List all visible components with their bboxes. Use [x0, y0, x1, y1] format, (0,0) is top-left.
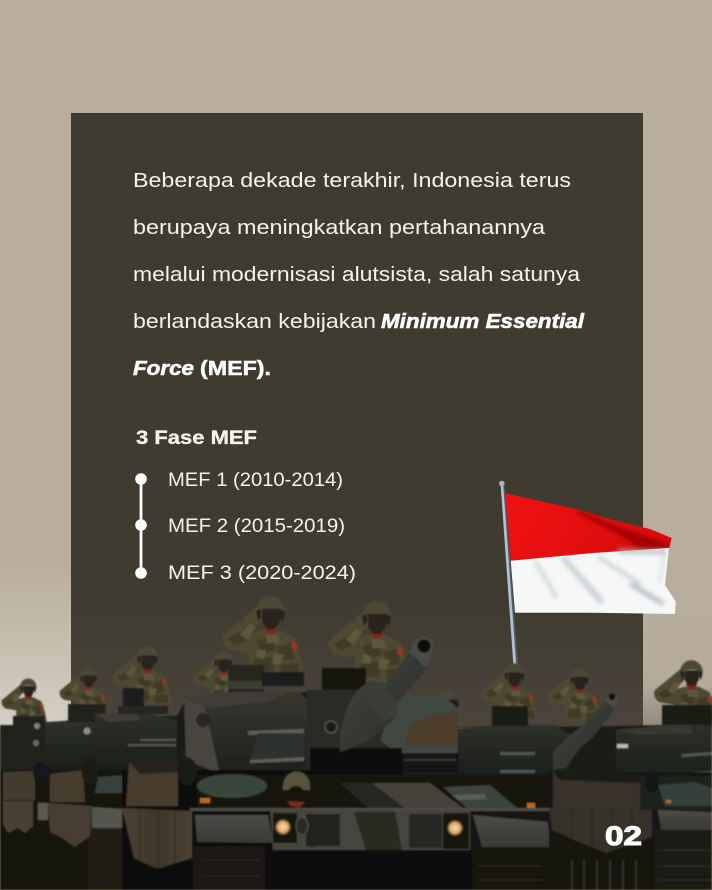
timeline labels: MEF 1 (2010-2014): [168, 469, 343, 491]
lead tank turret: [184, 665, 458, 780]
rear tanks left: [0, 688, 177, 775]
tank scene: [0, 596, 712, 890]
solid tank silhouette base: [0, 692, 712, 890]
timeline: [135, 473, 147, 579]
intro paragraph: berlandaskan kebijakan: [133, 310, 376, 333]
icon: headlights: [275, 817, 463, 847]
driver in hatch: [283, 771, 310, 808]
lead tank left side hull: [122, 757, 322, 890]
timeline labels: [168, 469, 356, 584]
right hull: [549, 770, 712, 890]
intro paragraph: Beberapa dekade terakhir, Indonesia terus: [133, 169, 571, 192]
panel: dark text card: [71, 113, 643, 728]
fog left: [0, 560, 72, 730]
lead tank gun: [340, 633, 438, 752]
soldiers: rear row right: [439, 660, 712, 723]
intro paragraph: Minimum Essential: [381, 310, 585, 333]
far left hulls: [0, 758, 130, 890]
intro paragraph: melalui modernisasi alutsista, salah satunya: [133, 263, 581, 286]
soldiers: commanders on lead tank: [223, 596, 410, 682]
intro paragraph: Force: [133, 357, 194, 380]
heading: 3 Fase MEF: 3 Fase MEF: [136, 427, 257, 449]
intro paragraph: (MEF).: [200, 357, 271, 380]
page number: 02: [605, 821, 642, 851]
tank gun: right: [553, 694, 618, 770]
fog right: [643, 600, 712, 730]
soldiers: rear row left: [1, 646, 244, 724]
intro paragraph: [133, 169, 585, 380]
timeline labels: MEF 2 (2015-2019): [168, 515, 345, 537]
intro paragraph: berupaya meningkatkan pertahanannya: [133, 216, 546, 239]
lead tank deck and front plate: [190, 774, 555, 890]
rear tanks right: [459, 705, 712, 782]
timeline labels: MEF 3 (2020-2024): [168, 562, 356, 584]
icon: Indonesian flag: [499, 481, 676, 668]
